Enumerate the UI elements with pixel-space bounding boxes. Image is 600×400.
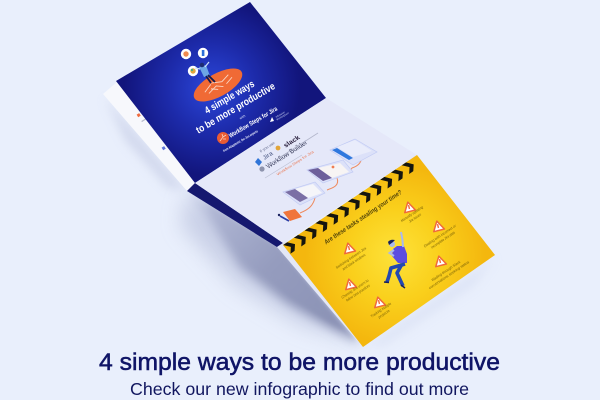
workflow builder: Workflow Builder	[264, 139, 309, 170]
icon: multicolour circle	[188, 66, 198, 76]
warning 6: conversations seeking status	[428, 260, 470, 290]
flap tiny mark: blue	[162, 146, 166, 150]
infographic mockup scene	[99, 2, 500, 398]
title: 4 simple ways: 4 simple ways	[203, 79, 257, 117]
small grey text lower	[265, 155, 302, 178]
atlassian marketplace: Atlassian	[275, 110, 286, 119]
warning 4: Manually updating	[400, 205, 424, 223]
panel: light middle	[195, 98, 417, 243]
title: to be more productive: to be more productive	[195, 81, 277, 136]
white paper edge	[277, 243, 363, 347]
small grey text	[268, 133, 318, 165]
hazard chevron band	[283, 160, 417, 254]
navy fold strip	[187, 183, 283, 247]
headline: 4 simple ways to be more productive	[99, 349, 500, 376]
slack label: slack	[283, 134, 302, 149]
warning 5: incomplete Jira data	[431, 230, 456, 250]
warning 1: and Slack windows	[342, 253, 366, 271]
person dancing	[384, 232, 407, 288]
panel: cover blue	[116, 2, 326, 183]
orange oval with pattern	[189, 62, 247, 108]
cast shadow	[105, 97, 495, 347]
warning 3: Tracking multiple	[370, 302, 392, 319]
card 1	[283, 182, 325, 205]
from adaptavist: from Adaptavist, the Jira experts	[222, 129, 259, 153]
card 2	[307, 160, 353, 183]
subheading: Check our new infographic to find out more	[130, 379, 469, 399]
jira label: Jira	[261, 150, 275, 161]
flap tiny mark: orange	[137, 113, 141, 117]
atlassian marketplace	[270, 110, 290, 122]
warning 1: Switching between Jira	[335, 246, 368, 270]
if you use: if you use	[259, 141, 276, 153]
warning 3: projects	[378, 309, 390, 319]
with: with	[239, 114, 246, 120]
icon: workflow builder	[259, 166, 265, 172]
card 3	[330, 139, 377, 165]
warning 2: follow best practices	[346, 284, 371, 303]
connectors	[300, 157, 362, 213]
orange subtitle: Workflow Steps for Jira	[276, 150, 316, 176]
flap tiny mark: text	[141, 118, 147, 122]
panel: white left flap	[103, 82, 195, 191]
question heading: Are these tasks stealing your time?	[324, 189, 403, 246]
panel: yellow	[283, 155, 495, 347]
icon: jira	[255, 158, 262, 166]
warning 4: Jira issues	[408, 212, 422, 224]
product name: Workflow Steps for Jira	[228, 106, 279, 140]
warning 6: Wading through Slack	[431, 260, 461, 282]
icon: blue circle	[198, 48, 208, 58]
icon: slack	[276, 146, 280, 150]
atlassian marketplace: Marketplace	[276, 110, 290, 121]
warning 2: Chasing Jira users to	[341, 278, 369, 300]
icon: workflow logo	[217, 132, 229, 144]
orange box and person	[278, 209, 302, 221]
icon: orange circle	[181, 49, 191, 59]
person juggling	[195, 62, 215, 83]
warning 5: Dealing with incorrect or	[423, 223, 457, 248]
